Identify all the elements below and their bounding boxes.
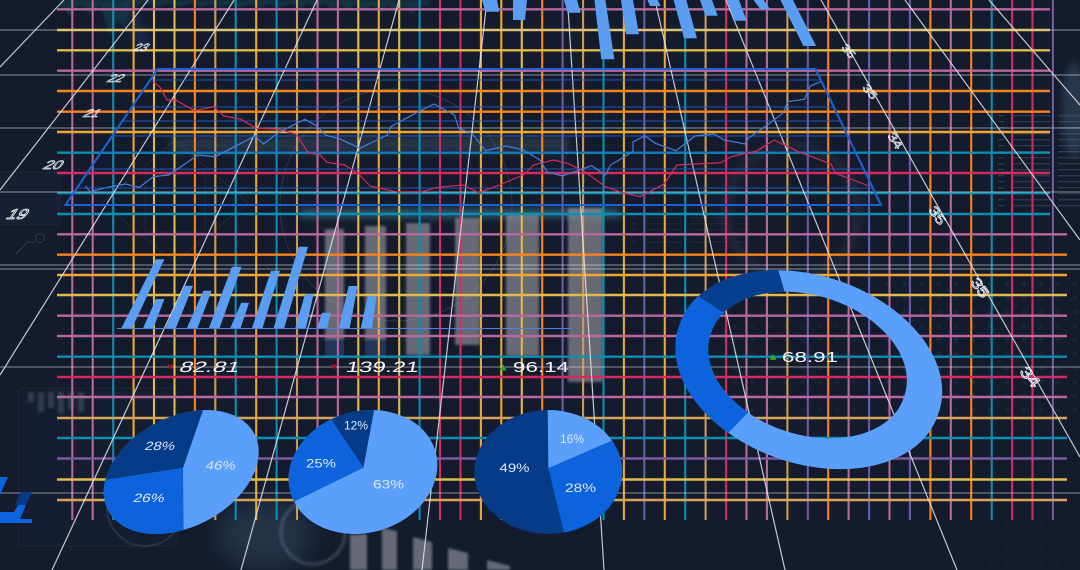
pie 1 light slice	[83, 385, 280, 559]
pie 3 labels	[500, 432, 596, 495]
down marker red	[330, 364, 338, 370]
donut medium segment	[675, 296, 748, 433]
ghost: teal spiky waveform at top	[60, 0, 430, 35]
donut chart	[675, 270, 942, 470]
ghost: dashed band lower left	[15, 510, 90, 514]
ghost: gauge ring centre	[280, 89, 512, 321]
fragment dark	[15, 492, 32, 505]
pie 2 labels: 25%	[306, 456, 336, 470]
pie 1 medium slice	[104, 468, 184, 534]
donut light segment	[675, 270, 942, 469]
axis labels right: 35	[925, 204, 948, 228]
pie 1 labels: 28%	[143, 439, 177, 453]
value text: 139.21	[344, 359, 421, 376]
value: 139.21	[330, 359, 421, 376]
ghost: dim blue streak upper left	[125, 0, 150, 50]
ghost: node circle left	[36, 234, 44, 242]
ghost: small bars inside left panel	[28, 392, 84, 414]
up marker green	[500, 364, 506, 370]
pie 2 light slice	[274, 393, 452, 551]
pie chart 2	[288, 410, 438, 534]
donut up marker	[770, 354, 776, 360]
ghost: code text block right	[998, 112, 1080, 210]
pie chart 3	[474, 410, 622, 534]
value: 96.14	[500, 359, 569, 376]
fragment top	[0, 477, 8, 495]
axis labels right	[839, 42, 1044, 391]
ghost: dashed band left	[0, 435, 85, 439]
axis labels right: 35	[860, 81, 880, 102]
ghost: dot cloud right	[880, 280, 1080, 420]
donut dark segment	[698, 270, 784, 312]
chart frame trapezoid	[65, 69, 881, 205]
ghost: dot cloud inside donut	[730, 325, 860, 425]
ghost: blurred shape far right	[1062, 62, 1080, 158]
blue fragment lower left	[0, 477, 32, 523]
ghost: blue column bases	[325, 340, 386, 358]
bar chart baseline	[117, 328, 572, 330]
axis labels right: 34	[885, 129, 906, 152]
chart inner gridlines	[77, 80, 873, 188]
pie 2 dark slice	[331, 410, 374, 468]
pie 2 medium slice	[288, 420, 364, 502]
ghost: left gauge diamond	[102, 140, 248, 262]
ghost: dot cloud lower right	[975, 518, 1080, 568]
ghost: lower centre code	[630, 215, 750, 245]
axis labels right: 35	[839, 42, 858, 61]
axis labels left: 20	[40, 159, 67, 172]
pie 1 labels: 26%	[132, 491, 167, 505]
pie 3 medium slice	[548, 440, 622, 532]
axis labels right: 35	[967, 275, 992, 301]
ghost: node icon left	[16, 242, 35, 254]
axis labels left: 19	[3, 206, 33, 222]
axis labels right: 34	[1016, 363, 1044, 391]
ghost: gauge ring right	[726, 146, 858, 278]
pie 3 dark slice	[474, 410, 622, 534]
pie 3 labels: 28%	[565, 481, 596, 495]
axis labels left: 21	[80, 107, 106, 119]
ghost: ring at bottom	[281, 500, 345, 564]
red data series	[153, 82, 869, 197]
blue data series	[85, 82, 821, 192]
value text: 96.14	[513, 359, 569, 376]
pie 2 labels: 12%	[344, 418, 368, 432]
axis labels left	[3, 42, 153, 222]
pie 3 labels: 16%	[560, 432, 584, 446]
ghost: grey building columns	[325, 208, 603, 382]
pie 2 labels: 63%	[373, 478, 404, 492]
line chart	[65, 69, 881, 205]
ghost: grey bars at bottom	[350, 528, 510, 570]
ghost: hazy horizontal band	[170, 137, 570, 153]
ghost: left panel	[18, 388, 177, 546]
value text: 82.81	[176, 360, 243, 376]
value: 82.81	[167, 360, 243, 376]
fragment lower	[0, 505, 32, 523]
ghost: glowing teal band	[300, 209, 620, 217]
ghost: panel frame left	[0, 172, 60, 225]
ghost: faint circle at left	[107, 470, 183, 546]
pie 2 labels	[306, 418, 404, 492]
pie 1 dark slice	[105, 410, 203, 480]
donut value: 68.91	[782, 349, 838, 366]
pie 1 labels	[132, 439, 238, 505]
pie chart 1	[104, 410, 259, 534]
pie 3 labels: 49%	[500, 461, 530, 475]
top bar chart (perspective, cut off at top edge)	[482, 0, 816, 59]
pie 1 labels: 46%	[204, 459, 238, 472]
axis labels left: 23	[130, 42, 153, 53]
lower bar chart	[117, 247, 572, 328]
axis labels left: 22	[104, 72, 128, 84]
ghost: blurred glow at bottom	[217, 501, 313, 569]
pie 3 light slice	[548, 410, 612, 468]
down marker red	[167, 364, 174, 370]
